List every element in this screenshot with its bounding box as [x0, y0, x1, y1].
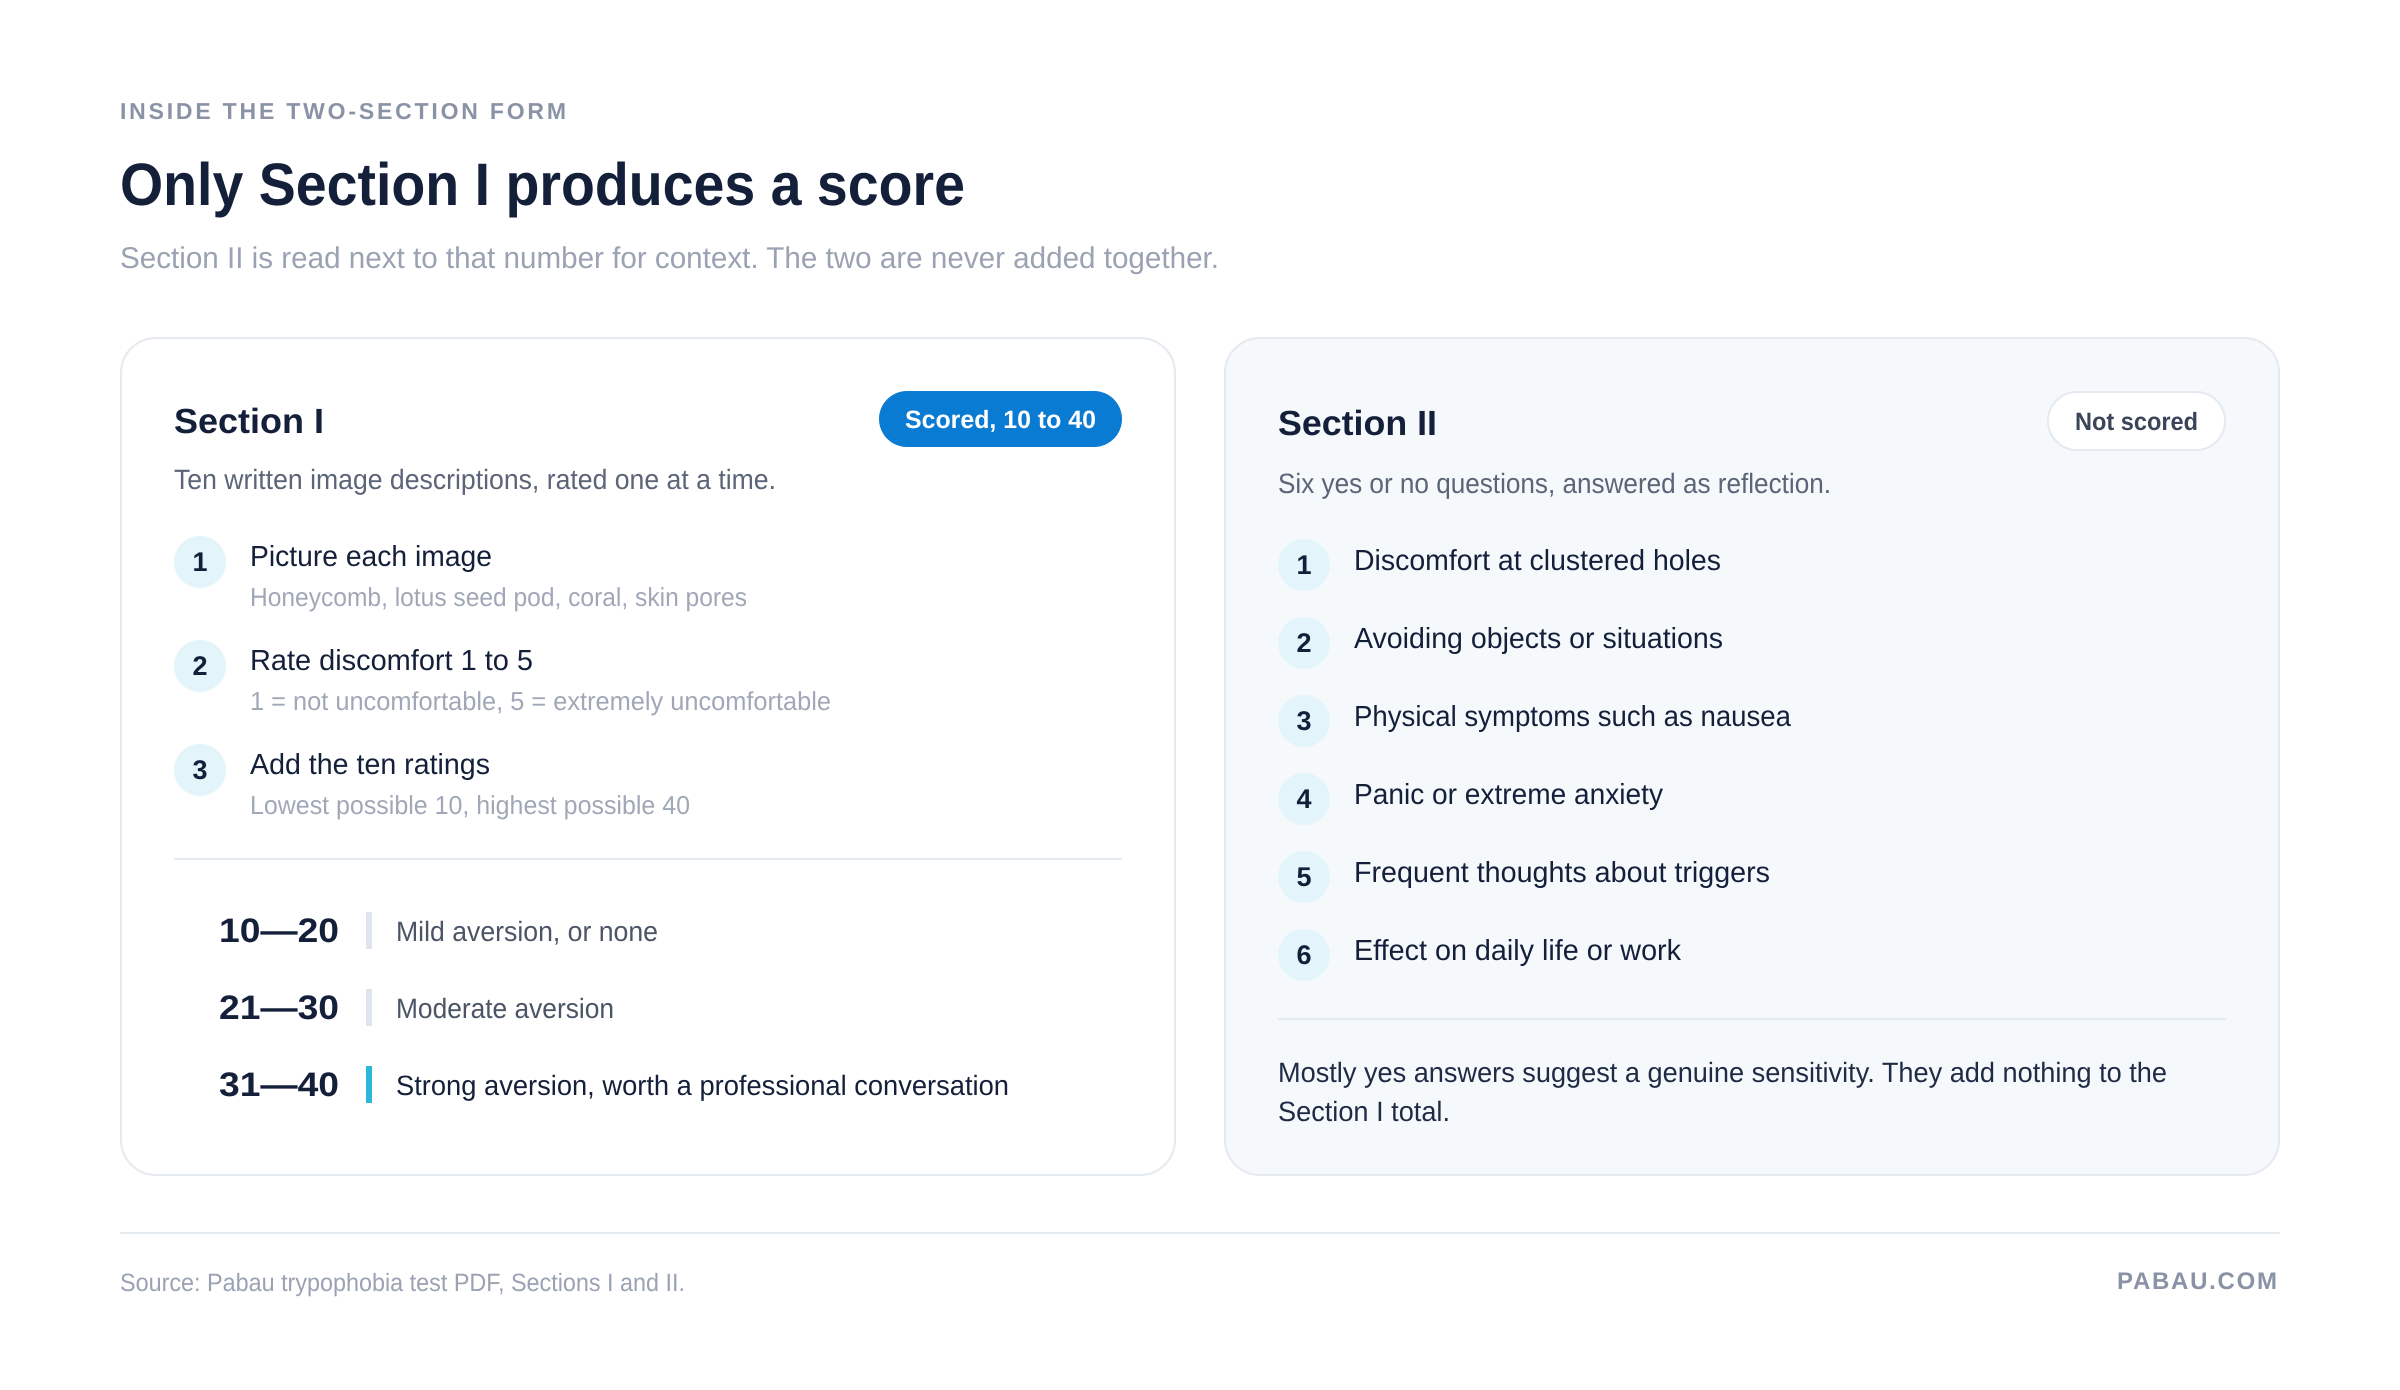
- panel: section I: [121, 338, 1175, 1175]
- question 5: 5: [1296, 862, 1312, 892]
- question 3: Physical symptoms such as nausea: [1354, 701, 1792, 733]
- question 1: Discomfort at clustered holes: [1354, 545, 1721, 577]
- step 2: [174, 640, 831, 716]
- question 4: [1278, 773, 1663, 825]
- score band: 21 to 30: 21—30: [219, 989, 339, 1027]
- score band: 31 to 40: [219, 1066, 1009, 1104]
- badge: scored: [879, 391, 1122, 447]
- question 5: [1278, 851, 1770, 903]
- question 1: 1: [1296, 550, 1312, 580]
- step 2: 2: [192, 651, 208, 681]
- step 1: Honeycomb, lotus seed pod, coral, skin pores: [250, 582, 747, 612]
- score band: 31 to 40: Strong aversion, worth a professional conversation: [396, 1070, 1009, 1101]
- score band: 10 to 20: 10—20: [219, 912, 339, 950]
- eyebrow: INSIDE THE TWO-SECTION FORM: [120, 98, 566, 124]
- step 1: [174, 536, 747, 612]
- question 6: 6: [1296, 940, 1312, 970]
- score band: 21 to 30: Moderate aversion: [396, 993, 614, 1024]
- question 2: 2: [1296, 628, 1312, 658]
- section II description: Six yes or no questions, answered as reflection.: [1278, 468, 1831, 499]
- question 3: 3: [1296, 706, 1312, 736]
- section I description: Ten written image descriptions, rated one at a time.: [174, 464, 776, 495]
- score band: 10 to 20: Mild aversion, or none: [396, 916, 658, 947]
- score band: 31 to 40: 31—40: [219, 1066, 339, 1104]
- badge: not scored: [2048, 392, 2225, 450]
- question 5: Frequent thoughts about triggers: [1354, 857, 1770, 889]
- section II note: Section I total.: [1278, 1096, 1450, 1127]
- question 2: Avoiding objects or situations: [1354, 623, 1723, 655]
- section II note: Mostly yes answers suggest a genuine sensitivity. They add nothing to the: [1278, 1057, 2167, 1088]
- question 6: [1278, 929, 1681, 981]
- step 1: Picture each image: [250, 541, 492, 573]
- section II note: [1278, 1057, 2167, 1127]
- source note: Source: Pabau trypophobia test PDF, Sections I and II.: [120, 1269, 685, 1297]
- step 3: Add the ten ratings: [250, 749, 490, 781]
- question 2: [1278, 617, 1723, 669]
- step 2: Rate discomfort 1 to 5: [250, 645, 533, 677]
- panel: section II: [1225, 338, 2279, 1175]
- score band: 10 to 20: [219, 912, 658, 950]
- subtitle: Section II is read next to that number for context. The two are never added together.: [120, 242, 1219, 275]
- question 1: [1278, 539, 1721, 591]
- step 2: 1 = not uncomfortable, 5 = extremely uncomfortable: [250, 686, 831, 716]
- step 1: 1: [192, 547, 208, 577]
- step 3: 3: [192, 755, 208, 785]
- score band: 21 to 30: [219, 989, 614, 1027]
- step 3: Lowest possible 10, highest possible 40: [250, 790, 690, 820]
- badge: not scored: Not scored: [2075, 408, 2198, 436]
- section I heading: Section I: [174, 402, 324, 441]
- question 4: Panic or extreme anxiety: [1354, 779, 1663, 811]
- question 3: [1278, 695, 1792, 747]
- title: Only Section I produces a score: [120, 151, 965, 218]
- section II heading: Section II: [1278, 404, 1437, 443]
- step 3: [174, 744, 690, 820]
- question 4: 4: [1296, 784, 1312, 814]
- brand: PABAU.COM: [2117, 1268, 2277, 1295]
- badge: scored: Scored, 10 to 40: [905, 406, 1096, 434]
- question 6: Effect on daily life or work: [1354, 935, 1681, 967]
